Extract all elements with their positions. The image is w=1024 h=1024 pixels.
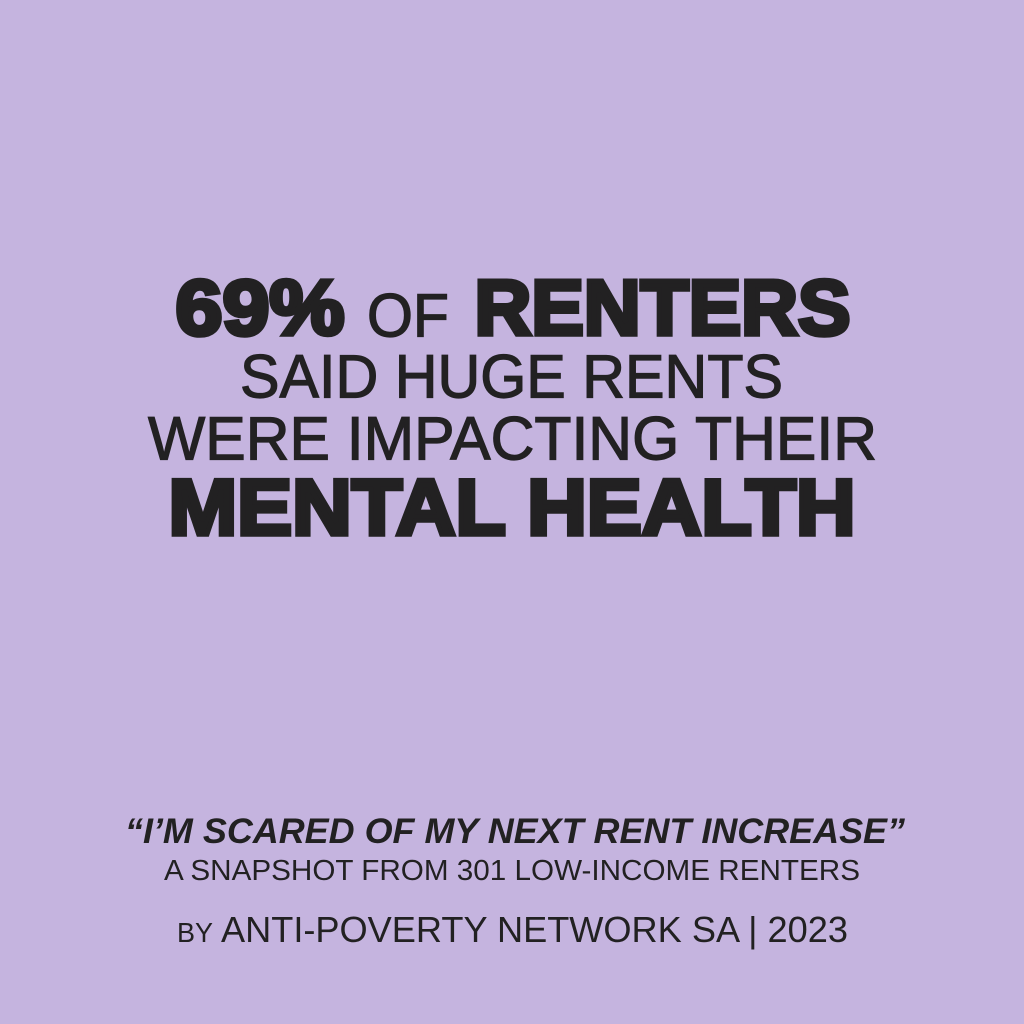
line 1: 69% of renters [176, 264, 850, 352]
line 2: said huge rents: SAID HUGE RENTS [240, 343, 783, 411]
line 3: were impacting their: WERE IMPACTING THEIR [148, 405, 877, 473]
report credit block [125, 812, 906, 950]
headline statistic [148, 264, 877, 552]
report title quote: “I’M SCARED OF MY NEXT RENT INCREASE” [125, 812, 906, 851]
line 1: 69% of renters: OF [367, 282, 449, 350]
author and year: ANTI-POVERTY NETWORK SA | 2023 [221, 909, 848, 950]
line 4: mental health: MENTAL HEALTH [168, 463, 856, 552]
line 1: 69% of renters: RENTERS [474, 264, 850, 352]
line 1: 69% of renters: 69% [176, 264, 344, 352]
author and year: BY [177, 917, 213, 948]
report subtitle: A SNAPSHOT FROM 301 LOW-INCOME RENTERS [164, 855, 860, 887]
